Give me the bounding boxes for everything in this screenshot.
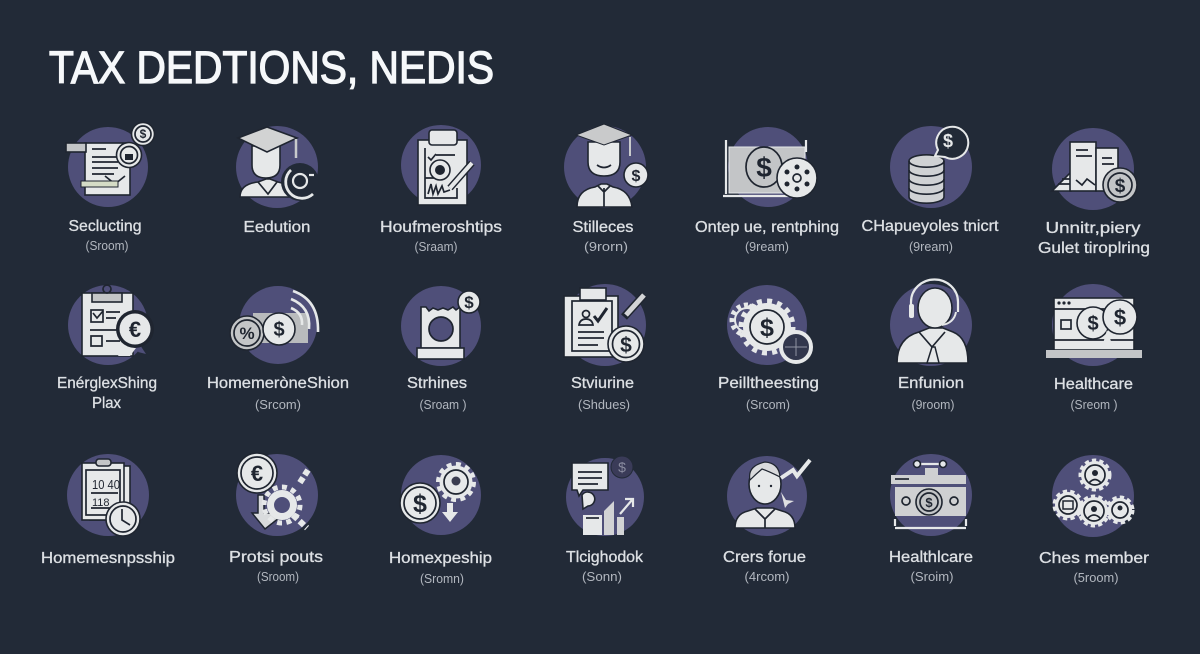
item: Ches member	[1039, 455, 1150, 585]
icon: banknote with percent coin and signal arcs: $	[273, 319, 285, 341]
icon: laptop with dollar coins	[1046, 284, 1142, 366]
title: TAX DEDTIONS, NEDIS	[49, 42, 494, 93]
icon: speech box, bars and arrow: $	[618, 459, 626, 475]
label: Eedution	[244, 219, 310, 236]
item: Stilleces	[564, 124, 648, 254]
sublabel: (9room)	[912, 398, 954, 412]
icon: tower with dollar badge: $	[464, 293, 474, 312]
item: CHapueyoles tnicrt	[862, 126, 999, 254]
icon: clipboard with euro magnifier: €	[129, 317, 141, 342]
icon: graduate with dollar coin: $	[632, 168, 641, 185]
item: Tlcighodok	[566, 456, 644, 584]
icon: euro coin, gear and arrow: €	[251, 461, 263, 486]
item: Protsi pouts	[229, 453, 323, 584]
item: Peilltheesting	[718, 285, 819, 412]
icon: graduate with coin	[236, 126, 319, 208]
label: Seclucting	[68, 218, 142, 235]
item: Seclucting	[66, 122, 154, 253]
label: Protsi pouts	[229, 549, 323, 566]
icon: banknote with dotted coin	[723, 127, 817, 207]
item: Strhines	[401, 286, 481, 412]
sublabel: (Sroom)	[257, 570, 299, 584]
sublabel: (Shdues)	[578, 398, 630, 412]
item: Homemesnpsship	[41, 454, 175, 567]
icon: clipboard with clock	[67, 454, 149, 536]
item: Enfunion	[890, 280, 972, 412]
item: HomemeròneShion	[207, 286, 349, 412]
sublabel: (Srcom)	[255, 398, 301, 412]
label: CHapueyoles tnicrt	[862, 218, 999, 235]
sublabel: (Sroim)	[910, 570, 954, 584]
icon: clipboard with clock: 118	[92, 497, 110, 509]
sublabel: (4rcom)	[744, 570, 790, 584]
item: Stviurine	[564, 284, 646, 412]
label: HomemeròneShion	[207, 375, 349, 392]
icon: gears with dollar coin: $	[760, 314, 774, 342]
label: Healthcare	[1054, 376, 1133, 393]
icon: dollar coin, gear and down arrow: $	[413, 490, 427, 518]
icon: banknote with percent coin and signal arcs: %	[239, 324, 255, 343]
label: Healthlcare	[889, 549, 973, 566]
sublabel: (Srcom)	[746, 398, 790, 412]
icon: cash machine: $	[925, 495, 933, 510]
icon: clipboard with clock: 10 40	[92, 477, 120, 492]
icon: document with lock and dollar coin: $	[140, 127, 147, 141]
item: Crers forue	[723, 456, 810, 584]
label: Crers forue	[723, 549, 806, 566]
label: Stilleces	[572, 219, 634, 236]
label line 2: Gulet tiroplring	[1038, 240, 1150, 257]
icon: person with zigzag arrow	[727, 456, 810, 536]
icon: documents with coin: $	[1115, 176, 1126, 197]
sublabel: (9ream)	[745, 240, 789, 254]
label: Enfunion	[898, 375, 964, 392]
sublabel: (Sonn)	[582, 570, 622, 584]
label: Stviurine	[571, 375, 634, 392]
icon: banknote with percent coin and signal arcs	[230, 286, 318, 364]
sublabel: (5room)	[1074, 571, 1118, 585]
item: Unnitr,piery Gulet tiroplring	[1038, 128, 1150, 257]
sublabel: (9rorn)	[584, 240, 628, 254]
icon: laptop with dollar coins: $	[1114, 305, 1126, 330]
label line 1: EnérglexShing	[57, 375, 157, 392]
icon: banknote with dotted coin: $	[756, 152, 772, 183]
icon: clipboard with pencil	[401, 125, 481, 205]
sublabel: (Sraam)	[414, 240, 458, 254]
item: Ontep ue, rentphing	[695, 127, 839, 254]
label line 1: Unnitr,piery	[1046, 220, 1140, 237]
label: Houfmeroshtips	[380, 219, 502, 236]
icon: laptop with dollar coins: $	[1087, 313, 1099, 335]
label: Homemesnpsship	[41, 550, 175, 567]
label: Strhines	[407, 375, 467, 392]
item: Houfmeroshtips	[380, 125, 502, 254]
label line 2: Plax	[92, 395, 121, 412]
label: Homexpeship	[389, 550, 492, 567]
sublabel: (Sroom)	[86, 239, 128, 253]
item: EnérglexShing Plax	[57, 285, 157, 412]
sublabel: (Sromn)	[420, 572, 464, 586]
icon: four gears with people	[1052, 455, 1134, 537]
item: Homexpeship	[389, 455, 492, 586]
icon: coin stack with speech bubble: $	[943, 131, 953, 151]
label: Tlcighodok	[566, 549, 644, 566]
sublabel: (Sroam )	[420, 398, 466, 412]
icon: person with headset	[890, 280, 972, 366]
item: Healthlcare	[889, 454, 973, 584]
item: Eedution	[236, 126, 319, 236]
sublabel: (9ream)	[909, 240, 953, 254]
icon: clipboard with check, pencil and coin: $	[620, 334, 632, 357]
label: Peilltheesting	[718, 375, 819, 392]
sublabel: (Sreom )	[1070, 398, 1118, 412]
item: Healthcare	[1046, 284, 1142, 412]
label: Ontep ue, rentphing	[695, 219, 839, 236]
label: Ches member	[1039, 550, 1150, 567]
